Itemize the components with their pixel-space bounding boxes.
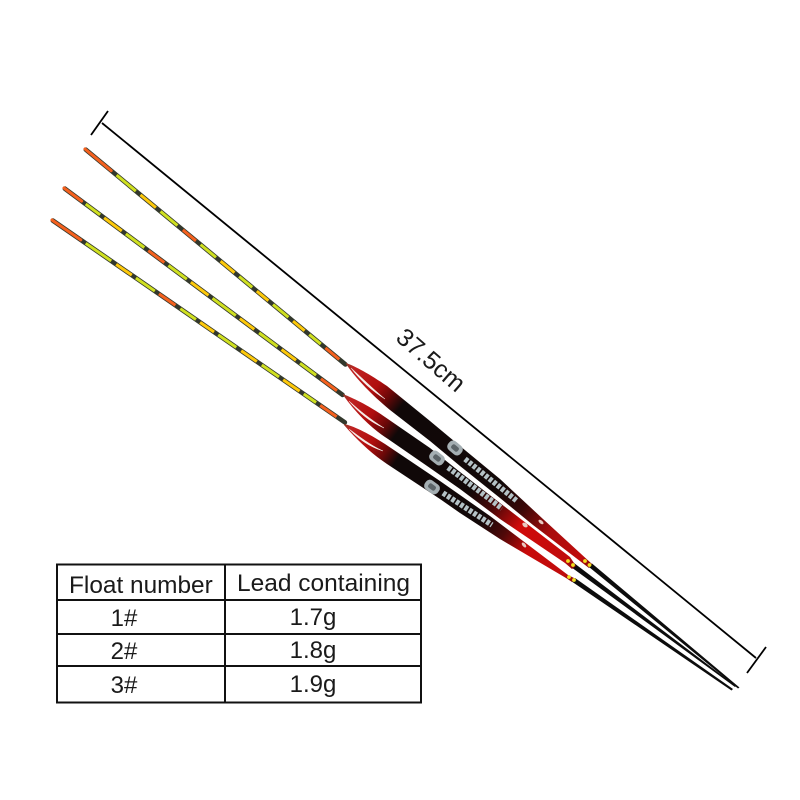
table: float number and lead containing: 1.7g bbox=[290, 604, 336, 631]
table: float number and lead containing: 1.9g bbox=[290, 671, 336, 698]
table: float number and lead containing: Lead containing bbox=[237, 570, 410, 597]
dimension line: 37.5cm overall length bbox=[91, 111, 766, 673]
float 1 label band bbox=[465, 459, 517, 501]
float 3 mark and beads bbox=[521, 542, 576, 582]
float 1 mark and beads bbox=[538, 519, 591, 567]
float 2 tail bbox=[571, 563, 736, 687]
float 2 body bbox=[343, 394, 576, 569]
float 2 highlight bbox=[349, 401, 384, 428]
float 2 antenna bbox=[64, 188, 343, 395]
table: float number and lead containing bbox=[57, 564, 421, 703]
float 3 bbox=[52, 220, 733, 690]
table: float number and lead containing: 3# bbox=[111, 672, 138, 699]
float 1 body bbox=[346, 363, 592, 568]
float 1 tail bbox=[589, 564, 740, 688]
float 1 antenna bbox=[85, 149, 345, 364]
float 3 antenna bbox=[52, 220, 345, 422]
float 2 logo bbox=[427, 449, 447, 467]
float 2 label band bbox=[448, 468, 502, 508]
table: float number and lead containing: 2# bbox=[111, 638, 138, 665]
table: float number and lead containing: 1.8g bbox=[290, 637, 336, 664]
float 2 mark and beads bbox=[521, 522, 575, 567]
float 3 tail bbox=[571, 578, 733, 690]
float 3 logo bbox=[422, 478, 442, 496]
float 1 highlight bbox=[351, 368, 385, 399]
float 3 body bbox=[344, 424, 576, 582]
table: float number and lead containing: 1# bbox=[111, 605, 138, 632]
float 2 bbox=[64, 188, 736, 687]
float 3 label band bbox=[443, 493, 492, 525]
table: float number and lead containing: Float number bbox=[69, 572, 213, 599]
float 3 highlight bbox=[349, 429, 383, 451]
float 1 logo bbox=[445, 439, 465, 457]
length label: 37.5cm bbox=[391, 323, 471, 398]
float 1 bbox=[85, 149, 740, 688]
